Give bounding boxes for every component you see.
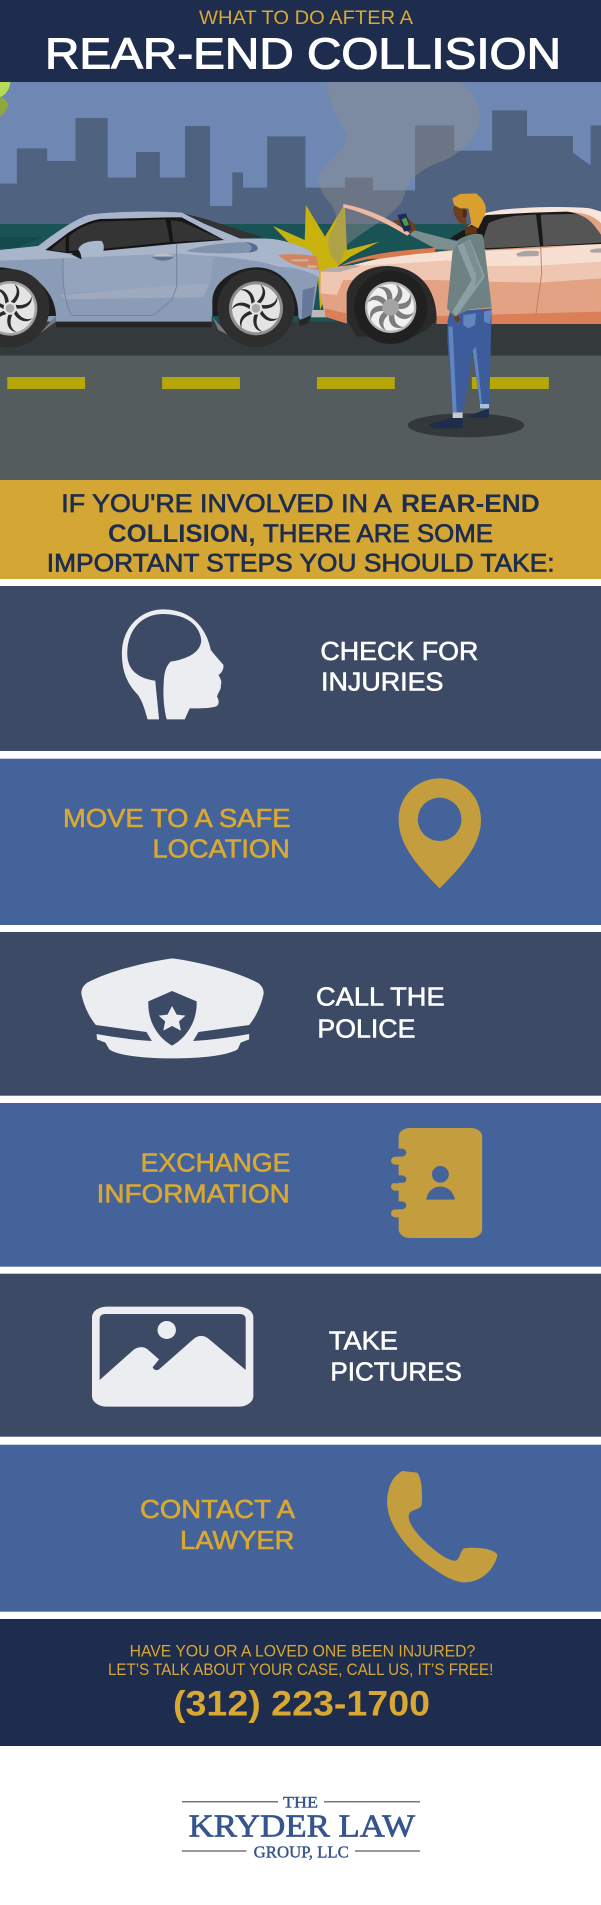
step label: POLICE (317, 1013, 415, 1043)
hair (452, 193, 486, 228)
lane markings (7, 377, 549, 389)
body (0, 212, 319, 322)
neck (465, 227, 477, 235)
front window (69, 219, 170, 251)
header banner (0, 0, 601, 82)
jacket highlights (452, 239, 485, 317)
front window (480, 215, 540, 248)
hood trim (340, 248, 437, 266)
law firm logo: GROUP, LLC (254, 1842, 349, 1861)
wheel arch (347, 266, 437, 337)
road surface (0, 356, 601, 480)
rear wheel (0, 269, 49, 348)
intro text: IMPORTANT STEPS YOU SHOULD TAKE: (47, 550, 555, 578)
intro text: REAR-END (401, 490, 540, 518)
rear window (541, 214, 601, 246)
scene background (0, 80, 601, 480)
wheel arch (212, 267, 298, 316)
phone number: (312) 223-1700 (173, 1684, 430, 1724)
intro text: THERE ARE SOME (263, 520, 493, 548)
smoke (319, 82, 480, 265)
lower body band (325, 308, 601, 324)
icon: location pin (399, 778, 481, 888)
panel: exchange information (0, 1103, 601, 1267)
icon: head (122, 609, 224, 719)
prompt text (108, 1643, 493, 1679)
step label: PICTURES (330, 1357, 462, 1387)
icon: police cap (81, 958, 264, 1058)
panel: contact a lawyer (0, 1445, 601, 1612)
step label: INJURIES (321, 667, 444, 697)
salmon car (320, 207, 601, 344)
face (453, 205, 467, 225)
step label: CONTACT A (140, 1494, 296, 1524)
rear wheel arch (0, 267, 56, 316)
ground shadow (408, 413, 524, 437)
roof (483, 207, 601, 223)
sill highlight (60, 284, 209, 299)
step label: LOCATION (152, 834, 290, 864)
panel: call the police (0, 932, 601, 1096)
phone (397, 213, 412, 232)
jeans highlights (448, 310, 492, 412)
grey car (0, 212, 319, 348)
main title: REAR-END COLLISION (45, 29, 561, 78)
step label: EXCHANGE (141, 1148, 290, 1178)
underbody (56, 315, 312, 327)
starburst impact (273, 203, 379, 310)
teal water band (0, 224, 601, 324)
door handles (516, 248, 601, 257)
panel: take pictures (0, 1274, 601, 1437)
ear (462, 209, 467, 218)
quarter window (51, 237, 66, 252)
door line (536, 247, 542, 317)
step label (316, 982, 445, 1043)
grey bumper top (321, 266, 361, 272)
headlight (278, 254, 319, 270)
icon: picture frame (92, 1307, 253, 1407)
law firm logo: THE (283, 1795, 318, 1812)
tree foliage (0, 82, 10, 117)
panel: move to a safe location (0, 759, 601, 925)
step label (140, 1494, 296, 1555)
hood scoop (186, 242, 258, 253)
intro band (0, 480, 601, 579)
road shoulder (0, 322, 601, 356)
step label: INFORMATION (97, 1179, 290, 1209)
sky (0, 80, 601, 480)
back shoe (467, 408, 489, 417)
upper body band (321, 261, 601, 295)
city skyline (0, 110, 601, 233)
panel: check for injuries (0, 586, 601, 751)
raised arm (410, 230, 458, 250)
panel: crash illustration (0, 80, 601, 480)
tyre shadows (40, 317, 228, 335)
prompt text: LET’S TALK ABOUT YOUR CASE, CALL US, IT’S FREE! (108, 1661, 493, 1679)
wheel (354, 271, 427, 344)
step label (329, 1326, 462, 1387)
door handle (152, 254, 174, 261)
side mirror (71, 241, 104, 259)
body (320, 207, 601, 324)
spoiler (183, 213, 263, 239)
window frame (450, 212, 601, 250)
upper cream panel (353, 243, 601, 267)
windows frame (45, 217, 224, 253)
step label (320, 636, 478, 697)
door outline (63, 243, 177, 315)
intro text (47, 490, 555, 578)
hood highlight (0, 212, 319, 277)
back sock (480, 404, 489, 408)
door panel tint (63, 253, 213, 293)
law firm logo: KRYDER LAW (189, 1808, 416, 1844)
rear window (171, 220, 222, 242)
law firm logo (182, 1795, 420, 1861)
intro text: IF YOU'RE INVOLVED IN A (61, 490, 392, 518)
step label (97, 1148, 290, 1209)
hand (393, 218, 417, 233)
front wheel (217, 270, 295, 347)
step label: TAKE (329, 1326, 398, 1356)
call to action footer (0, 1619, 601, 1746)
step label: CHECK FOR (320, 636, 478, 666)
step label (63, 803, 290, 864)
icon: phone handset (387, 1471, 498, 1582)
front shoe (428, 417, 463, 428)
bumper gap (307, 310, 333, 317)
intro text: COLLISION, (108, 520, 256, 548)
socks (453, 412, 463, 418)
jeans (447, 308, 492, 412)
person holding phone (343, 193, 524, 437)
jacket (447, 234, 492, 317)
sleeve shade (463, 240, 483, 287)
icon: address book (391, 1128, 482, 1238)
fog lamp (302, 287, 315, 319)
raised hood edge (343, 204, 410, 236)
hand in pocket (451, 311, 461, 323)
step label: LAWYER (180, 1525, 294, 1555)
prompt text: HAVE YOU OR A LOVED ONE BEEN INJURED? (130, 1643, 475, 1661)
step label: CALL THE (316, 982, 445, 1012)
kicker text: WHAT TO DO AFTER A (199, 7, 413, 29)
step label: MOVE TO A SAFE (63, 803, 290, 833)
